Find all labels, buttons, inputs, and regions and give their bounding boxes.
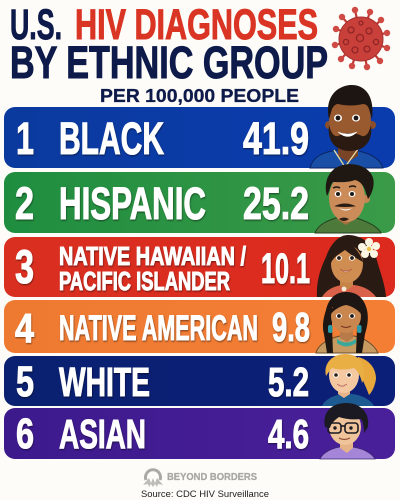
panel: row 1 Black: 41.9 [243,113,309,164]
title: U.S. [10,1,62,49]
panel: row 3 Native Hawaiian / Pacific Islander [4,235,395,297]
panel: row 6 Asian: ASIAN [59,411,146,457]
panel: row 3 Native Hawaiian / Pacific Islander: 10.1 [261,245,310,293]
label: two lines [59,243,246,296]
logo: Beyond Borders: BEYOND BORDERS [167,471,257,483]
label: two lines: NATIVE HAWAIIAN / [59,243,246,271]
title [10,1,328,88]
icon: virus [332,7,390,70]
panel: row 5 White: 5.2 [268,359,309,405]
panel: row 4 Native American: NATIVE AMERICAN [59,309,258,348]
panel: row 5 White: 5 [16,358,34,406]
panel: row 6 Asian: 6 [16,410,34,458]
panel: row 2 Hispanic: HISPANIC [59,178,206,229]
icon: flower [358,238,380,258]
panel: row 4 Native American: 4 [15,305,34,351]
icon: Native American woman portrait [316,292,378,353]
panel: row 1 Black: BLACK [59,113,164,164]
icon: Black man portrait [310,85,383,168]
source line: Source: CDC HIV Surveillance [141,489,269,499]
panel: row 5 White: WHITE [59,359,150,405]
panel: row 1 Black: 1 [16,113,34,164]
panel: row 6 Asian: 4.6 [268,411,309,457]
label: two lines: PACIFIC ISLANDER [59,268,230,296]
icon: Hispanic man portrait [315,164,381,233]
panel: row 1 Black [4,85,395,168]
panel: row 5 White [4,354,395,406]
icon: Asian man portrait [320,403,375,459]
panel: row 6 Asian [4,403,395,459]
panel: row 4 Native American [4,292,395,353]
icon: Pacific Islander woman portrait [317,235,386,297]
panel: row 4 Native American: 9.8 [272,304,310,350]
icon: White woman portrait [322,354,376,406]
panel: row 3 Native Hawaiian / Pacific Islander: 3 [15,240,34,293]
panel: row 2 Hispanic: 2 [15,178,34,229]
panel: row 2 Hispanic: 25.2 [243,178,309,229]
logo: Beyond Borders [143,470,257,487]
subtitle: PER 100,000 PEOPLE [100,86,299,106]
panel: row 2 Hispanic [4,164,395,233]
